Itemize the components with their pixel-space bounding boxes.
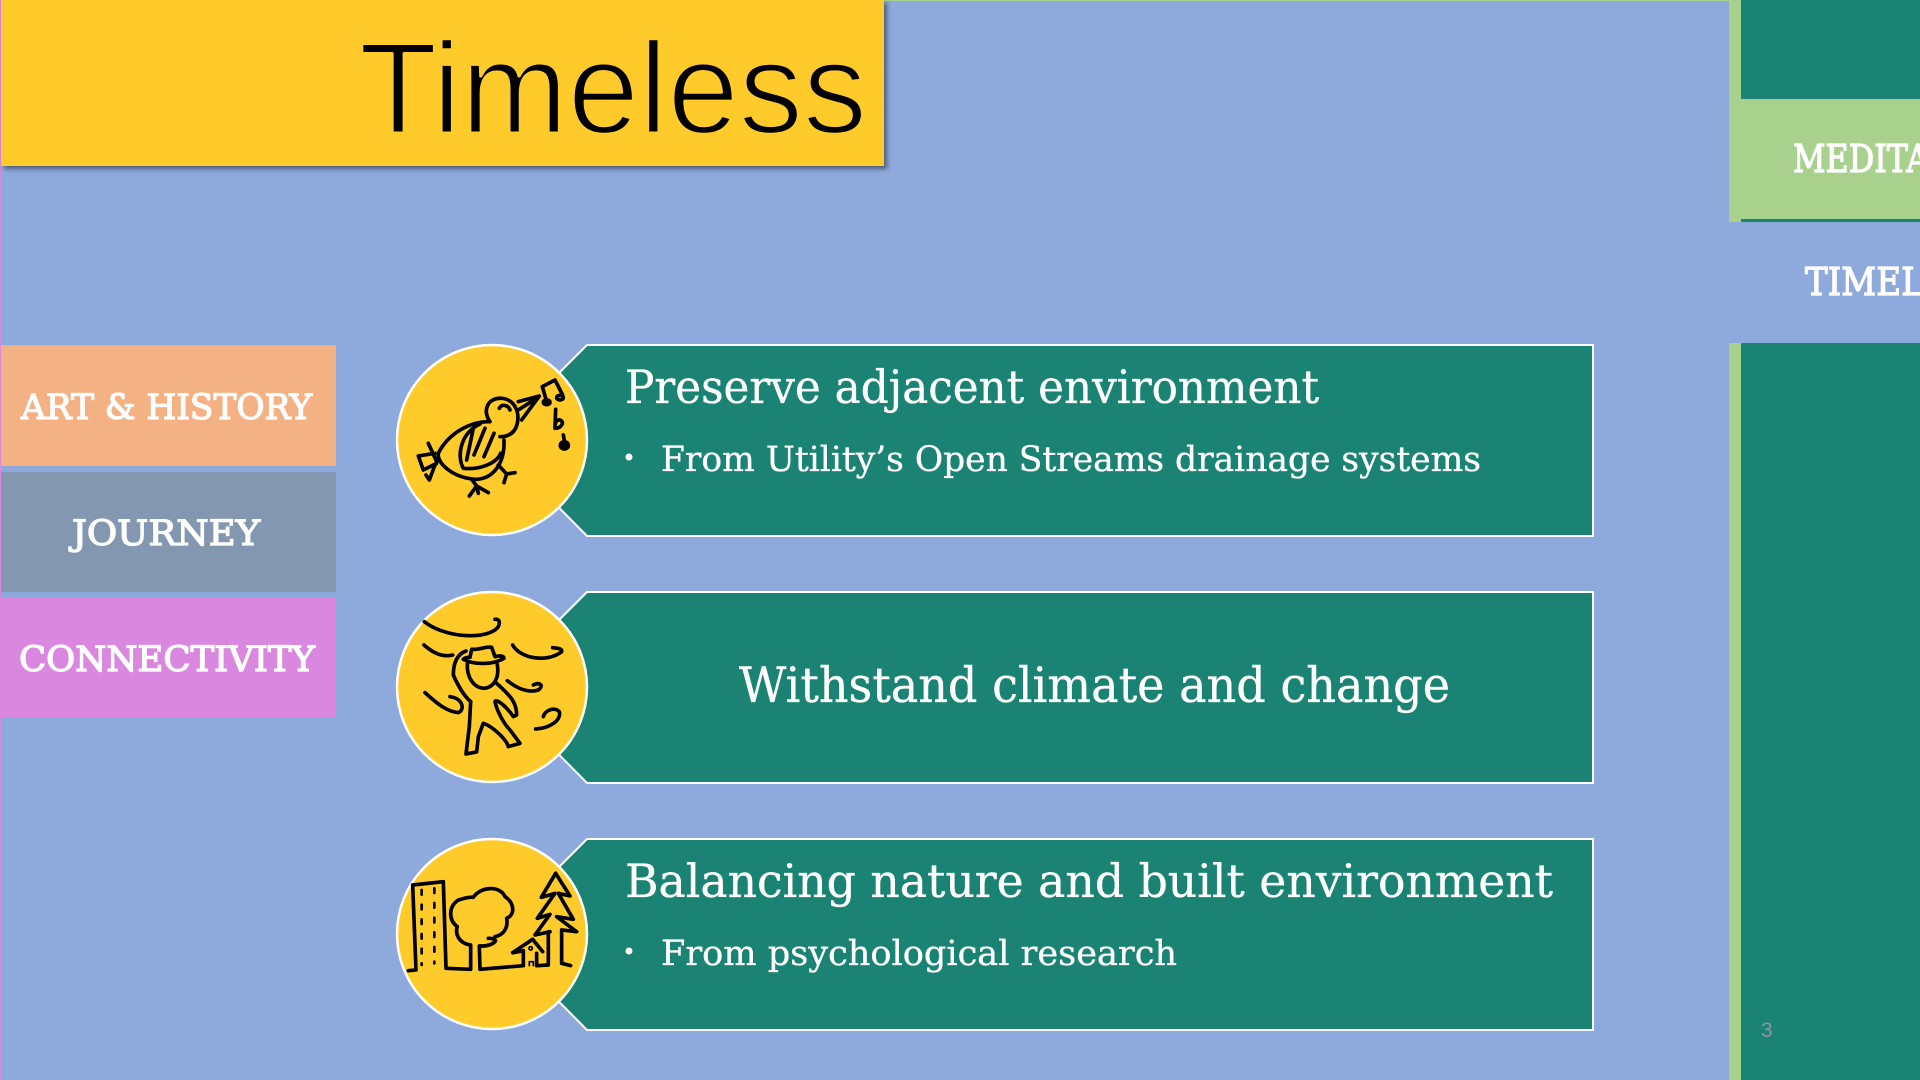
panel shape	[492, 592, 1593, 783]
tab: connectivity: CONNECTIVITY	[19, 640, 316, 680]
heading: Withstand climate and change	[739, 657, 1450, 714]
icon: city and nature	[397, 839, 587, 1029]
bullet text: From psychological research	[661, 934, 1177, 974]
tab: connectivity	[1, 598, 336, 718]
right side navigation strip	[1729, 0, 1920, 1080]
panel: balancing nature and built environment	[397, 839, 1593, 1030]
icon: person in wind	[397, 592, 587, 782]
slide number: 3	[1761, 1019, 1773, 1042]
heading: Preserve adjacent environment	[625, 360, 1319, 414]
title banner	[1, 0, 884, 166]
icon: singing bird	[397, 345, 587, 535]
panel shape	[492, 839, 1593, 1030]
panel: preserve adjacent environment	[397, 345, 1593, 536]
tab: journey: JOURNEY	[69, 514, 261, 554]
tab: art and history: ART & HISTORY	[20, 388, 313, 428]
tab: art and history	[1, 345, 336, 466]
heading: Balancing nature and built environment	[625, 854, 1553, 908]
bullet text: From Utility’s Open Streams drainage systems	[661, 440, 1481, 480]
title banner: Timeless	[359, 15, 867, 161]
panel shape	[492, 345, 1593, 536]
tab: journey	[1, 472, 336, 592]
panel: withstand climate and change	[397, 592, 1593, 783]
